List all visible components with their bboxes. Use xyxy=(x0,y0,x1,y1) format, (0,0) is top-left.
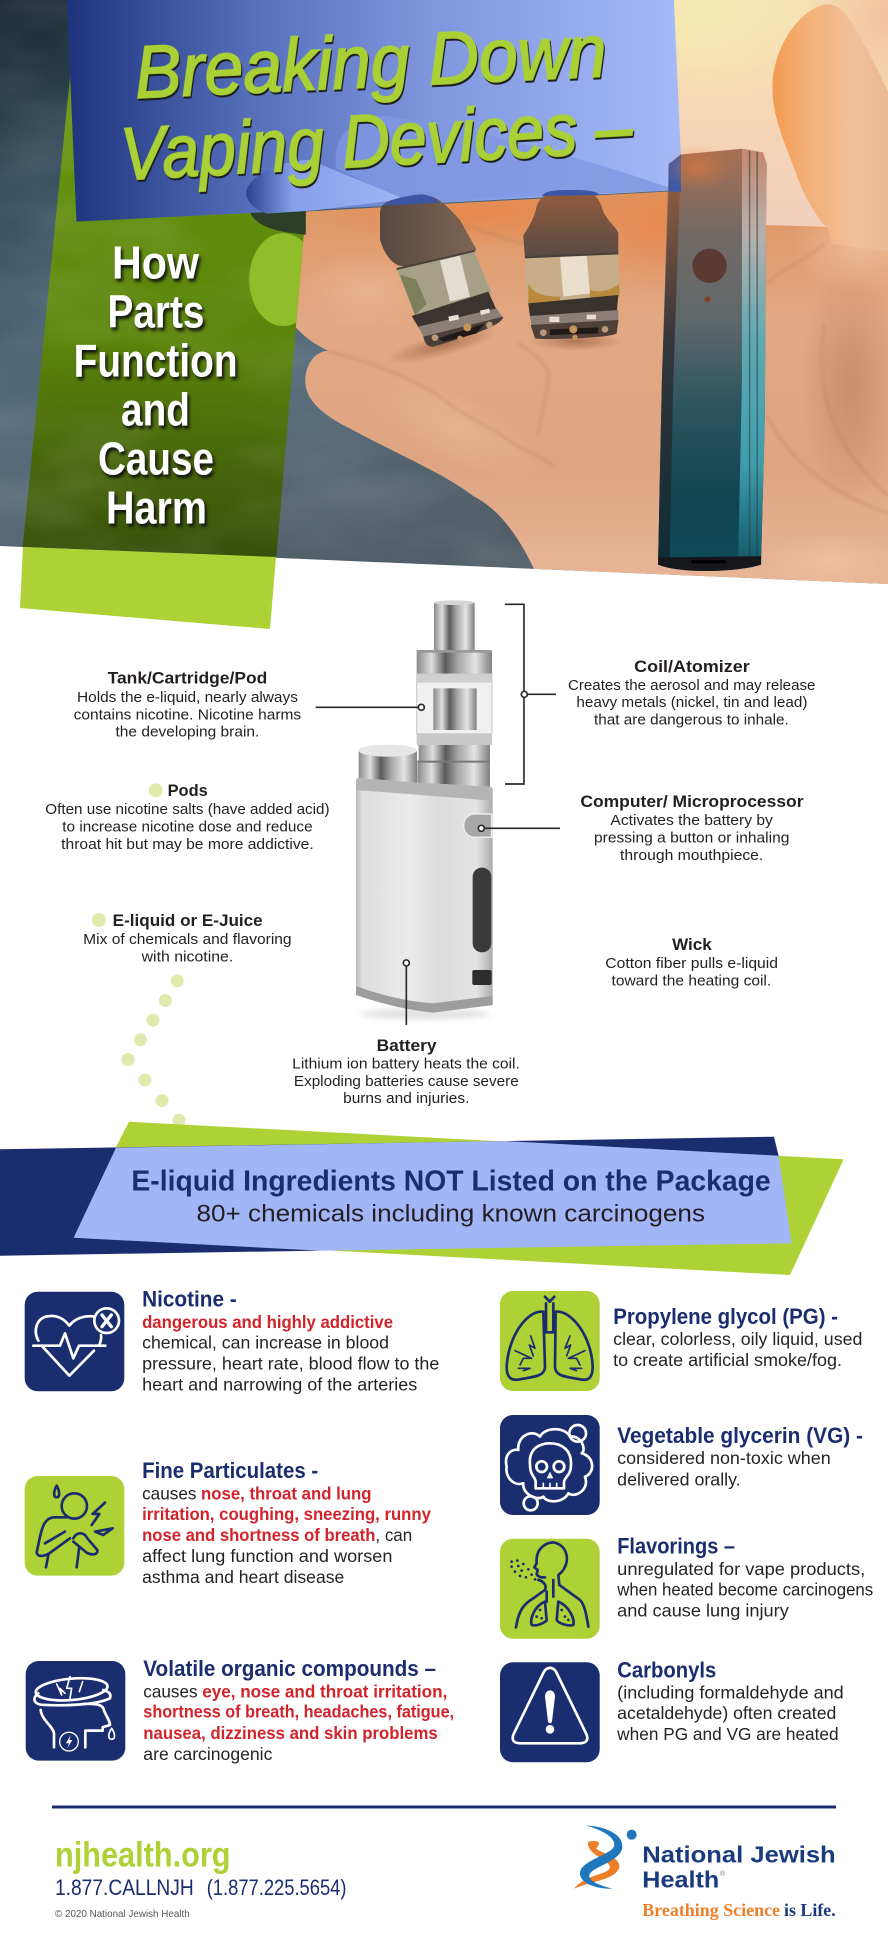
label: computer microprocessor: through mouthpiece. xyxy=(620,848,763,864)
green translucent panel xyxy=(22,75,306,558)
description xyxy=(143,1682,454,1764)
icon: skull in cloud xyxy=(500,1415,600,1515)
label: e-liquid: E-liquid or E-Juice xyxy=(113,912,263,930)
description: causes xyxy=(142,1483,196,1503)
description: considered non-toxic when xyxy=(617,1448,831,1468)
title: Vaping Devices – xyxy=(118,84,635,196)
label: coil atomizer: Creates the aerosol and may release xyxy=(568,678,815,694)
dotted path of e-liquid drops xyxy=(122,974,186,1127)
label: computer microprocessor: pressing a button or inhaling xyxy=(594,830,789,846)
description: acetaldehyde) often created xyxy=(617,1703,836,1723)
label: pods xyxy=(45,782,330,853)
description: irritation, coughing, sneezing, runny xyxy=(142,1504,431,1524)
heading: Vegetable glycerin (VG) - xyxy=(617,1423,863,1448)
title: Breaking Down xyxy=(133,9,608,114)
lime accent block below hero xyxy=(20,547,276,629)
lower ring xyxy=(417,745,490,787)
label: coil atomizer: that are dangerous to inhale. xyxy=(594,713,789,729)
logo: National Jewish Health: Health xyxy=(642,1867,719,1893)
item: flavorings xyxy=(500,1533,873,1639)
label: pods: Often use nicotine salts (have added acid) xyxy=(45,802,330,818)
description: asthma and heart disease xyxy=(142,1567,344,1587)
label: tank cartridge pod: contains nicotine. Nicotine harms xyxy=(74,707,301,723)
label: wick xyxy=(605,936,778,989)
panel: hero photo of hand holding vape device and pods xyxy=(0,0,888,588)
description: chemical, can increase in blood xyxy=(142,1333,389,1353)
footer contact: © 2020 National Jewish Health xyxy=(55,1908,190,1920)
heading: Carbonyls xyxy=(617,1657,716,1682)
description: affect lung function and worsen xyxy=(142,1546,392,1566)
thumb xyxy=(772,4,888,252)
subtitle: how parts function and cause harm: Cause xyxy=(98,432,214,484)
icon: heart with pulse xyxy=(25,1292,124,1391)
top ring xyxy=(417,650,492,674)
icon: pod cartridges xyxy=(380,190,620,347)
logo: National Jewish Health: ® xyxy=(720,1870,726,1878)
label: e-liquid xyxy=(83,912,292,965)
description: unregulated for vape products, xyxy=(617,1559,865,1579)
icon: vape pen device xyxy=(658,145,767,571)
description: heart and narrowing of the arteries xyxy=(142,1374,417,1394)
subtitle: how parts function and cause harm: How xyxy=(112,236,199,288)
description: clear, colorless, oily liquid, used xyxy=(613,1329,862,1349)
heading: Propylene glycol (PG) - xyxy=(613,1304,838,1329)
subtitle: how parts function and cause harm: Parts xyxy=(108,285,204,337)
banner: e-liquid ingredients xyxy=(0,1122,844,1275)
footer contact: 1.877.CALLNJH xyxy=(55,1875,194,1900)
icon: person with chest pain xyxy=(25,1476,124,1576)
description: nose and shortness of breath xyxy=(142,1525,375,1545)
heading: Flavorings – xyxy=(617,1533,735,1558)
title xyxy=(118,9,635,196)
label: tank cartridge pod: the developing brain. xyxy=(116,725,259,741)
icon: helix xyxy=(574,1825,637,1889)
item: nicotine xyxy=(25,1286,439,1394)
label: pods: to increase nicotine dose and reduce xyxy=(62,819,313,835)
label: coil atomizer: Coil/Atomizer xyxy=(634,658,750,676)
item: fine particulates xyxy=(25,1458,431,1587)
item: carbonyls xyxy=(500,1657,844,1762)
subtitle: how parts function and cause harm: Harm xyxy=(106,481,207,533)
icon: lungs xyxy=(500,1291,600,1391)
label: tank cartridge pod: Holds the e-liquid, nearly always xyxy=(77,690,298,706)
palm and fingers xyxy=(296,192,888,584)
label: tank cartridge pod xyxy=(74,670,301,741)
description: shortness of breath, headaches, fatigue, xyxy=(143,1702,454,1722)
glass tank xyxy=(417,674,492,745)
vape mod device illustration xyxy=(316,600,560,1025)
hand photo xyxy=(267,0,888,587)
footer contact xyxy=(55,1836,346,1920)
logo: National Jewish Health: Breathing Science xyxy=(642,1900,780,1920)
label: computer microprocessor: Computer/ Microprocessor xyxy=(580,793,804,811)
subtitle: how parts function and cause harm xyxy=(74,236,238,533)
banner heading: E-liquid Ingredients NOT Listed on the Package xyxy=(131,1166,771,1198)
footer contact: njhealth.org xyxy=(55,1836,230,1875)
description: , can xyxy=(375,1525,412,1545)
label: computer microprocessor: Activates the battery by xyxy=(610,813,774,829)
description xyxy=(616,1559,873,1621)
icon: inhaling person and lungs xyxy=(500,1539,600,1639)
description xyxy=(142,1312,439,1394)
label: battery: Lithium ion battery heats the coil. xyxy=(292,1056,520,1072)
description: to create artificial smoke/fog. xyxy=(613,1350,842,1370)
skin creases xyxy=(328,225,888,513)
description: causes xyxy=(143,1682,198,1702)
label: battery xyxy=(292,1037,520,1107)
device shadow xyxy=(360,1009,490,1019)
description: (including formaldehyde and xyxy=(617,1682,844,1702)
description: and cause lung injury xyxy=(617,1601,789,1621)
description xyxy=(613,1329,862,1370)
fingers seen through blue panel xyxy=(246,116,676,214)
label: wick: Wick xyxy=(672,936,713,954)
logo: National Jewish Health xyxy=(574,1825,836,1920)
smoky background xyxy=(0,0,888,588)
label: coil atomizer xyxy=(568,658,815,729)
label: computer microprocessor xyxy=(580,793,804,864)
label: pods: throat hit but may be more addictive. xyxy=(61,837,314,853)
label: tank cartridge pod: Tank/Cartridge/Pod xyxy=(108,670,267,688)
icon: head with headache xyxy=(26,1661,125,1761)
bright background behind thumb xyxy=(674,0,888,227)
description xyxy=(616,1682,844,1744)
description: are carcinogenic xyxy=(143,1744,273,1764)
description xyxy=(617,1448,831,1489)
pod left xyxy=(380,194,503,347)
label: e-liquid: with nicotine. xyxy=(141,949,233,965)
description: nausea, dizziness and skin problems xyxy=(143,1723,438,1743)
label: wick: Cotton fiber pulls e-liquid xyxy=(605,956,778,972)
subtitle: how parts function and cause harm: and xyxy=(121,383,190,435)
description: when PG and VG are heated xyxy=(616,1724,839,1744)
subtitle: how parts function and cause harm: Function xyxy=(74,334,238,386)
description: delivered orally. xyxy=(617,1469,741,1489)
label: battery: Exploding batteries cause severe xyxy=(294,1074,519,1090)
heading: Volatile organic compounds – xyxy=(143,1656,436,1681)
logo: National Jewish Health: is Life. xyxy=(784,1900,836,1920)
description: eye, nose and throat irritation, xyxy=(202,1682,447,1702)
label: battery: Battery xyxy=(377,1037,437,1055)
body xyxy=(356,778,493,1013)
blue translucent panel xyxy=(67,0,682,222)
description: nose, throat and lung xyxy=(201,1483,372,1503)
banner subheading: 80+ chemicals including known carcinogens xyxy=(196,1200,705,1228)
drip tip xyxy=(434,600,475,651)
icon: warning triangle xyxy=(500,1662,600,1762)
label: wick: toward the heating coil. xyxy=(612,973,771,989)
logo: National Jewish Health: National Jewish xyxy=(642,1842,836,1868)
fire disc xyxy=(359,745,417,783)
heading: Nicotine - xyxy=(142,1286,237,1312)
item: volatile organic compounds xyxy=(26,1656,454,1764)
description: pressure, heart rate, blood flow to the xyxy=(142,1354,439,1374)
heading: Fine Particulates - xyxy=(142,1458,318,1483)
description: dangerous and highly addictive xyxy=(142,1312,393,1332)
label: e-liquid: Mix of chemicals and flavoring xyxy=(83,932,292,948)
label: pods: Pods xyxy=(168,782,208,800)
description xyxy=(142,1483,431,1587)
item: propylene glycol xyxy=(500,1291,862,1391)
label: coil atomizer: heavy metals (nickel, tin and lead) xyxy=(576,695,808,711)
footer contact: (1.877.225.5654) xyxy=(207,1875,346,1900)
leader lines and markers xyxy=(316,604,560,1025)
item: vegetable glycerin xyxy=(500,1415,863,1515)
pod right xyxy=(523,190,620,340)
label: battery: burns and injuries. xyxy=(343,1091,469,1107)
description: when heated become carcinogens xyxy=(616,1580,873,1600)
